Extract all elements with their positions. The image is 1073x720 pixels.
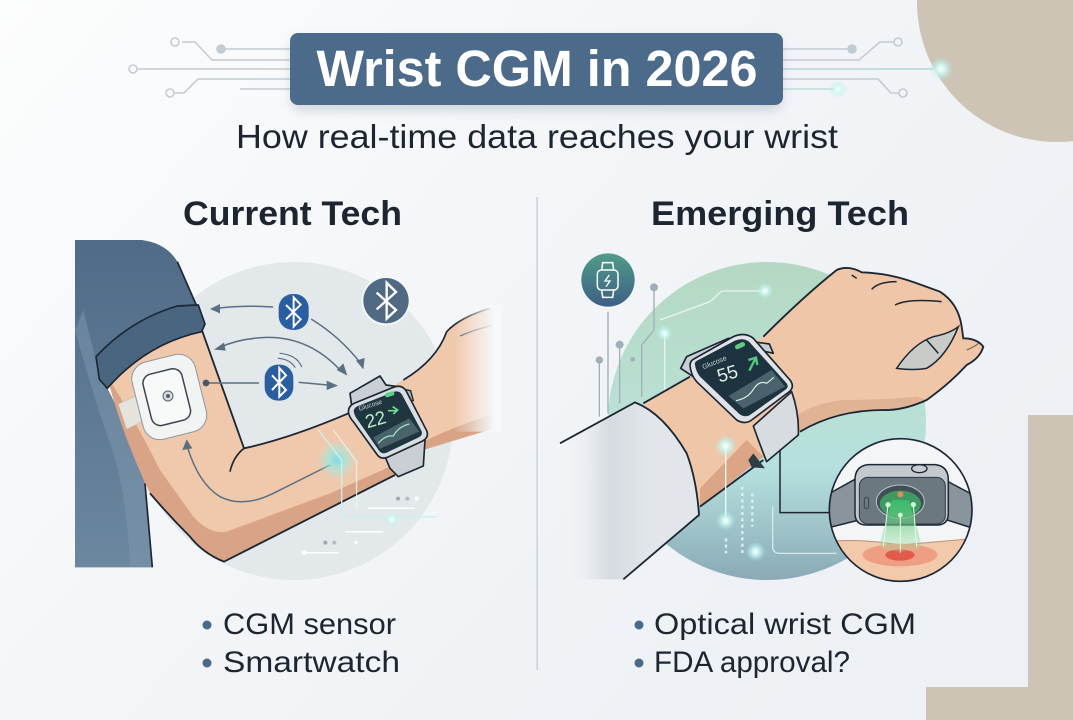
bullet list: current tech: Smartwatch (223, 646, 400, 679)
wrist and watch artwork (543, 253, 983, 590)
arm and watch artwork (75, 240, 502, 567)
icon: watch badge (581, 253, 635, 307)
hand and forearm (643, 268, 983, 507)
icon: bluetooth badge (361, 276, 411, 325)
panel: current tech illustration (75, 240, 502, 580)
title pill (290, 33, 783, 110)
heading: current tech: Current Tech (183, 195, 402, 233)
background circle left (135, 262, 453, 580)
smartwatch current tech (348, 376, 427, 477)
center divider (536, 197, 538, 670)
bullet list: emerging tech: FDA approval? (654, 646, 850, 679)
inset: optical sensor close-up (827, 439, 977, 590)
sleeve cuff (96, 305, 205, 388)
sleeve and torso (75, 240, 205, 567)
bullet list: emerging tech (634, 608, 916, 679)
arrows (182, 304, 365, 502)
circuit lines behind wrist (596, 282, 774, 417)
heading: emerging tech: Emerging Tech (651, 195, 909, 233)
subtitle: How real-time data reaches your wrist (236, 118, 838, 155)
glowing data traces (714, 435, 837, 562)
bullet list: current tech (202, 608, 400, 679)
smartwatch emerging tech (681, 335, 798, 468)
lab coat sleeve (543, 402, 699, 579)
smartwatch emerging tech: 55 (714, 360, 740, 386)
icon: bluetooth upper (279, 294, 309, 330)
sleeve outlines (560, 402, 699, 579)
bullet list: emerging tech: Optical wrist CGM (654, 608, 916, 641)
title pill: Wrist CGM in 2026 (316, 40, 758, 97)
arm (107, 305, 502, 562)
smartwatch current tech: 22 (363, 406, 388, 432)
background circle right (608, 262, 926, 580)
circuit lines around title (129, 38, 953, 98)
icon: bluetooth lower (265, 365, 293, 401)
smartwatch current tech: Glucose (358, 399, 383, 413)
icon: CGM sensor patch (118, 351, 210, 443)
glowing circuit traces (302, 430, 437, 555)
panel: emerging tech illustration (543, 253, 983, 590)
smartwatch emerging tech: Glucose (701, 355, 728, 371)
decorative corner shapes (917, 0, 1073, 720)
bullet list: current tech: CGM sensor (223, 608, 396, 641)
